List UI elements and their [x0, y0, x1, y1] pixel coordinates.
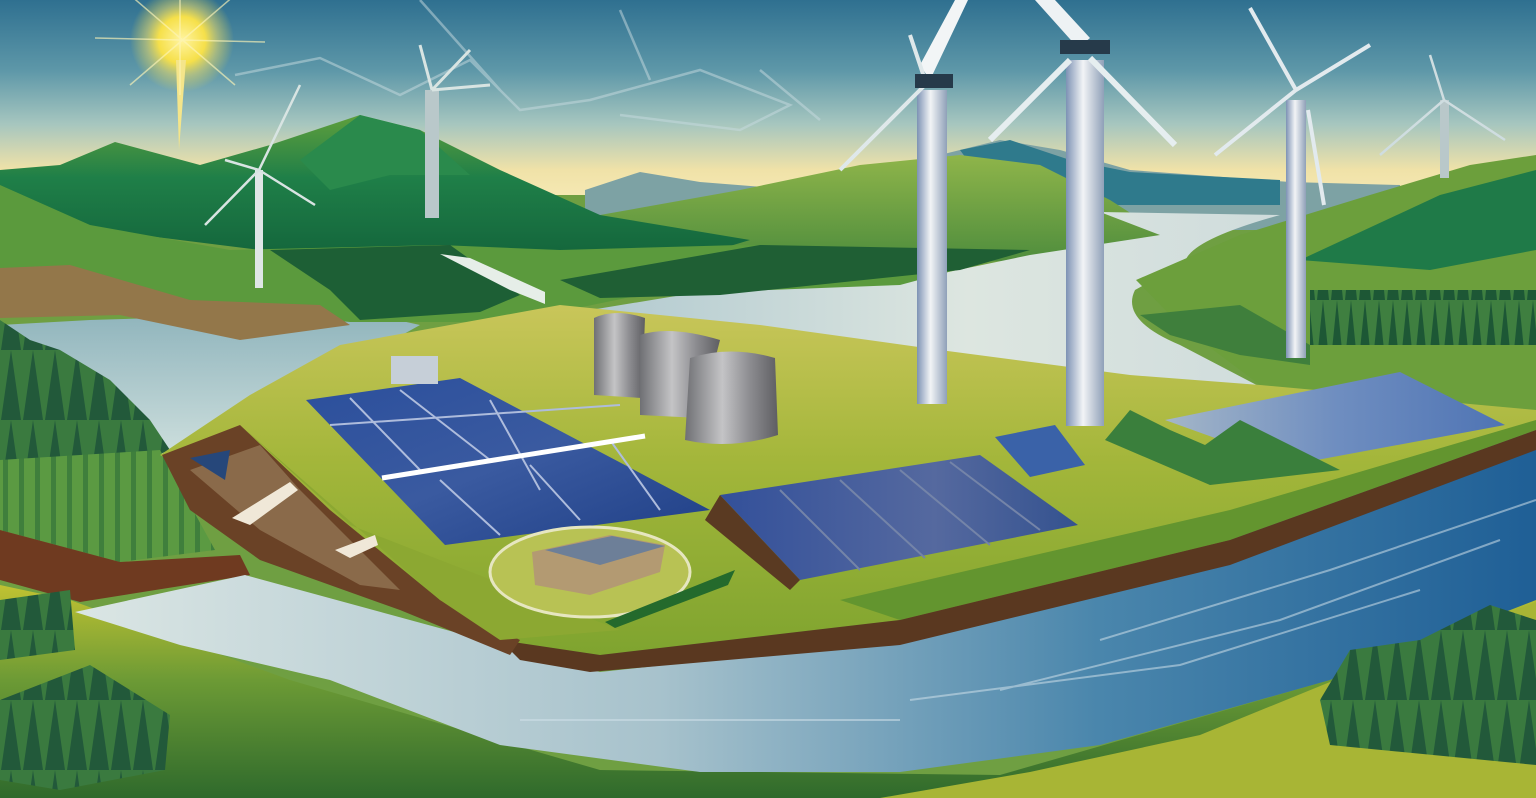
wind turbine: back left — [420, 45, 490, 218]
back hills right-center — [600, 155, 1165, 270]
distant mountains — [585, 140, 1400, 230]
sky background — [0, 0, 1536, 200]
river back channel — [500, 212, 1280, 395]
main river foreground — [75, 425, 1536, 772]
right green hills — [1136, 155, 1536, 410]
waterfall — [440, 254, 545, 304]
soil strata detail — [190, 445, 400, 590]
solar array: center — [705, 455, 1078, 590]
wispy energy lines in sky — [235, 0, 820, 130]
central island field — [160, 305, 1536, 672]
small rooftop unit — [391, 356, 438, 384]
wind turbine: front tallest — [990, 0, 1175, 426]
foreground trees right — [1320, 605, 1536, 765]
solar array: right — [1165, 372, 1505, 465]
wind turbine: right — [1215, 8, 1370, 358]
foreground bank bottom right — [880, 602, 1536, 798]
foreground bank left — [0, 585, 1536, 798]
ground base — [0, 195, 1536, 798]
river ripples — [520, 500, 1536, 720]
storage tanks — [594, 313, 778, 444]
left lake — [0, 312, 420, 460]
left green mountains — [0, 115, 1030, 322]
wind turbine: center tall — [840, 0, 968, 404]
solar array: left main — [306, 378, 710, 545]
wind turbine: far right — [1380, 55, 1505, 178]
brown shore — [0, 265, 350, 340]
sun with rays — [95, 0, 265, 150]
solar array: small — [995, 425, 1085, 477]
tree row beside right array — [1105, 410, 1340, 485]
foreground trees left — [0, 590, 170, 790]
wind turbine: far left — [205, 85, 315, 288]
small building with ring — [490, 527, 735, 628]
left forest — [0, 320, 250, 602]
